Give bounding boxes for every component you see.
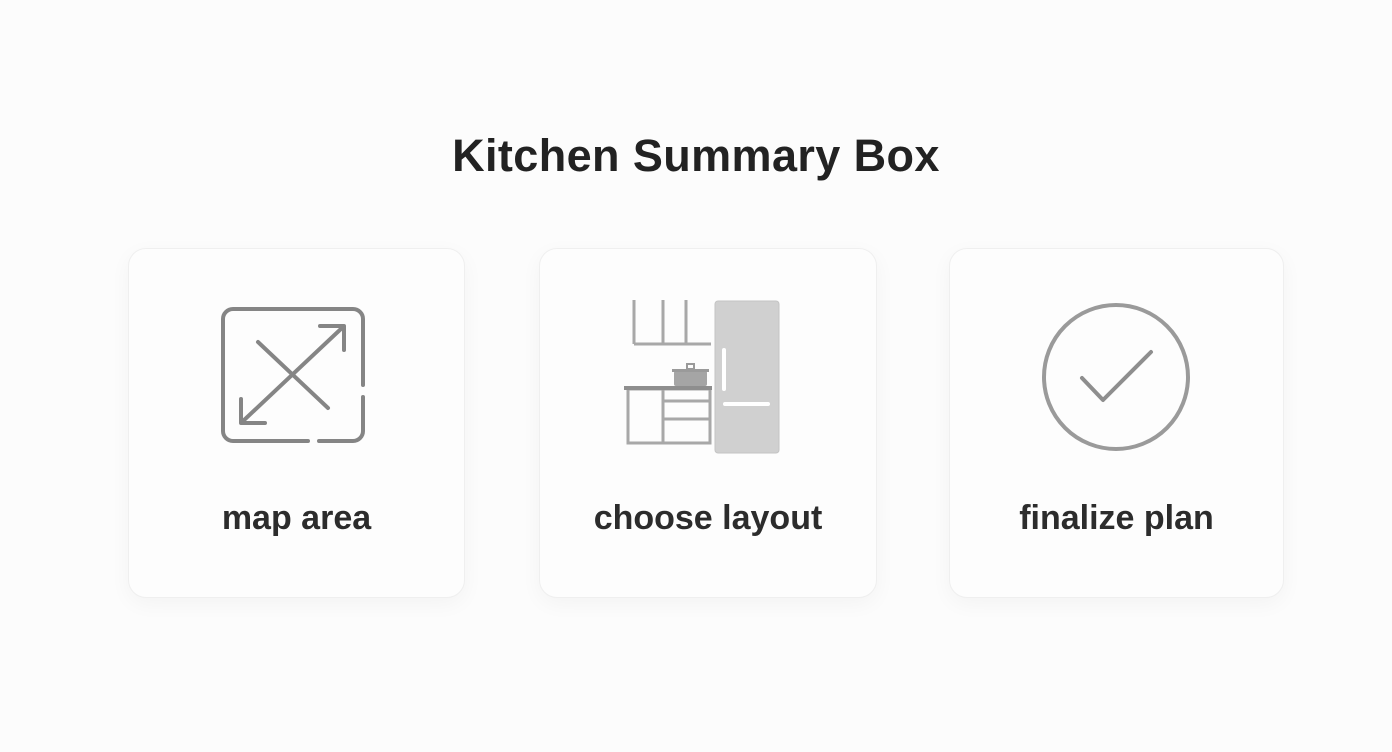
panel: finalize plan — [949, 248, 1284, 598]
panel: choose layout — [539, 248, 877, 598]
icon: expand arrows — [221, 307, 365, 443]
label: choose layout: choose layout — [594, 499, 822, 537]
icon: check circle — [1042, 303, 1190, 451]
icon: kitchen — [624, 300, 780, 454]
label: finalize plan: finalize plan — [1019, 499, 1214, 537]
panel: map area — [128, 248, 465, 598]
title: Kitchen Summary Box — [452, 130, 940, 181]
label: map area: map area — [222, 499, 371, 537]
